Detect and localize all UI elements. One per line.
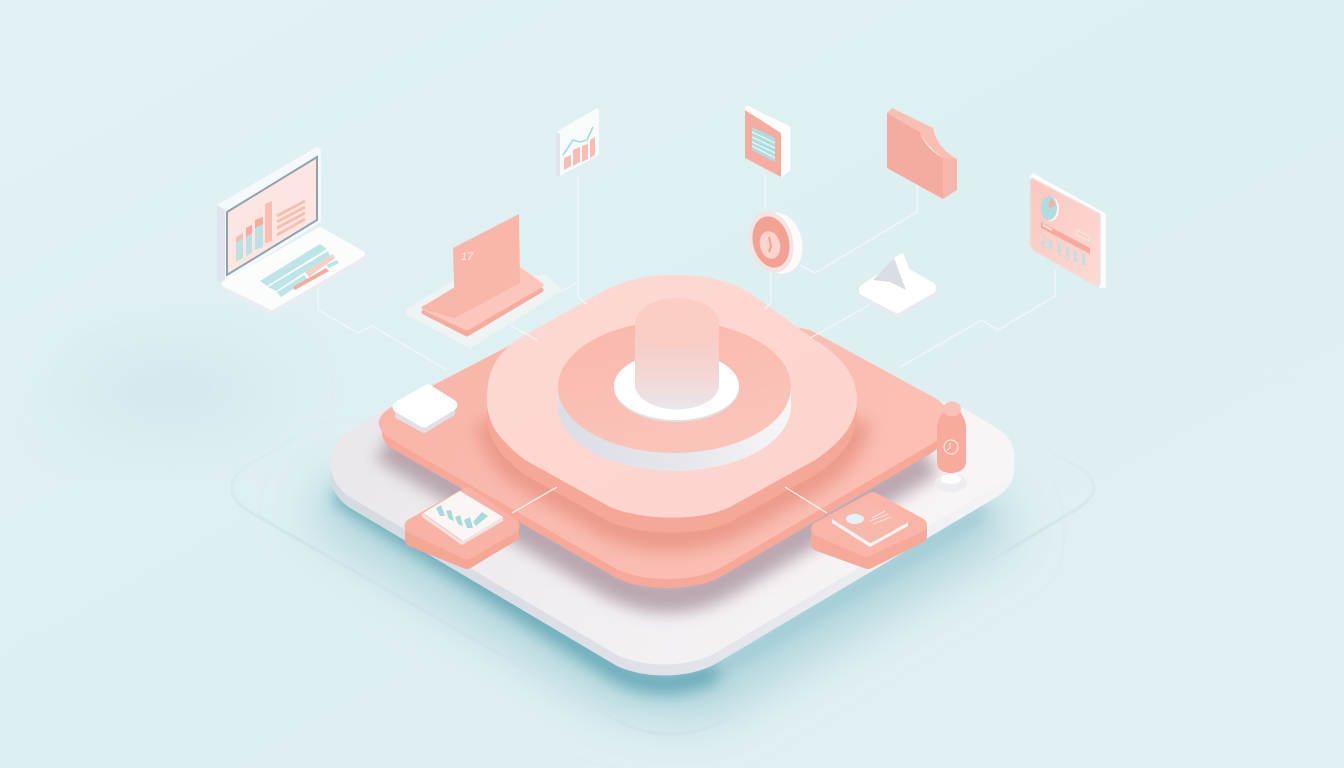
- teal mini chart: [436, 505, 488, 528]
- icon: chart card: [556, 108, 599, 177]
- icon: laptop: [217, 147, 362, 312]
- base platform shadow: [338, 492, 985, 683]
- card face: [834, 501, 907, 543]
- ambient teal glow around platform: [325, 495, 1000, 690]
- card pie: [846, 514, 864, 524]
- white ring: [614, 352, 739, 422]
- pie chart: [1041, 196, 1059, 221]
- front-left chart tile: [412, 491, 512, 562]
- icon: calendar panel on base: [409, 214, 556, 344]
- chart bars: [564, 137, 595, 170]
- mini bars: [1042, 238, 1085, 265]
- laptop base: [225, 235, 362, 312]
- calendar date: 17: [461, 251, 474, 263]
- chart line: [563, 127, 593, 155]
- central cylinder: [635, 298, 719, 409]
- calendar sheet: [453, 214, 520, 318]
- icon: clock: [742, 207, 809, 279]
- card under chart: [422, 513, 503, 545]
- glass outer plate: [232, 435, 1094, 734]
- keyboard stripes: [260, 244, 339, 297]
- base platform: [330, 320, 1015, 675]
- front-right tile: [818, 499, 920, 562]
- white tile on left: [398, 390, 452, 430]
- icon: folder: [887, 108, 957, 199]
- icon: triangle on tile: [865, 253, 930, 312]
- laptop screen: [217, 147, 321, 283]
- icon: document card: [745, 106, 790, 177]
- soft background shadow: [60, 355, 280, 425]
- card text lines: [870, 511, 891, 524]
- infographic canvas: [107, 106, 1106, 742]
- glass tray: [409, 279, 556, 344]
- top pink layer: [487, 275, 857, 533]
- central disc: [558, 321, 791, 471]
- progress bar: [1041, 222, 1090, 254]
- document lines: [752, 127, 775, 162]
- bottle icon: [944, 440, 958, 454]
- salmon base side: [424, 272, 541, 334]
- shadow of top layer on middle layer: [490, 420, 858, 538]
- laptop bars: [236, 201, 272, 262]
- card face: [423, 491, 503, 541]
- middle salmon layer: [379, 300, 949, 588]
- bottle device: [935, 402, 967, 492]
- icon: dashboard panel: [1030, 174, 1105, 287]
- connector lines: [318, 175, 1055, 513]
- laptop text lines: [277, 201, 305, 235]
- salmon base top: [424, 270, 541, 328]
- shadow of layers on base: [385, 445, 930, 596]
- card under: [832, 519, 908, 547]
